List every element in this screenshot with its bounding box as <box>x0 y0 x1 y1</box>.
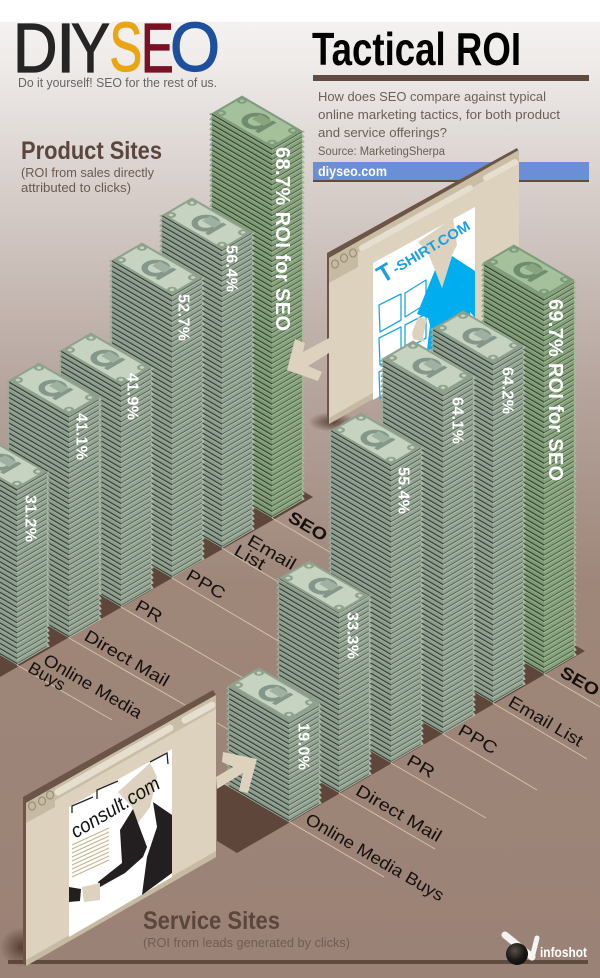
heading: Product Sites: (ROI from sales directly <box>21 165 154 180</box>
browser window: T-shirt site <box>327 148 519 424</box>
site name: -SHIRT.COM <box>389 217 473 277</box>
url bar: diyseo.com <box>318 163 387 179</box>
heading: Product Sites: attributed to clicks) <box>21 180 131 195</box>
heading: Product Sites: Product Sites <box>21 137 162 165</box>
category guide lines: service row <box>217 674 600 877</box>
browser window: consulting site <box>23 690 216 966</box>
infoshot logo: infoshot <box>540 944 587 960</box>
url bar <box>313 162 589 182</box>
logo: DIYSEO <box>13 8 220 87</box>
stack: product Online Media Buys <box>0 437 50 665</box>
intro text: and service offerings? <box>318 125 447 140</box>
site name: consult.com <box>67 773 164 843</box>
category labels: product row: PPC <box>183 566 229 603</box>
base shadow: product row <box>0 473 313 677</box>
category labels: service row: Direct Mail <box>353 781 445 846</box>
infoshot logo <box>505 935 587 965</box>
heading: Service Sites: Service Sites <box>143 907 280 935</box>
category labels: product row: PR <box>132 596 166 627</box>
stack: product SEO <box>210 96 304 518</box>
value: 68.7% ROI for SEO: 68.7% ROI for SEO <box>271 147 293 331</box>
stack: service PR <box>328 413 424 763</box>
heading: Service Sites <box>143 907 350 950</box>
category labels: product row: List <box>231 541 269 574</box>
logo: DIYSEO: O <box>170 8 220 86</box>
category labels: service row: PPC <box>455 721 501 758</box>
logo: DIYSEO: Y <box>71 9 110 87</box>
category labels: product row: Email <box>244 531 299 574</box>
stack: product PR <box>58 333 154 607</box>
intro text: Source: MarketingSherpa <box>318 146 446 158</box>
category labels: product row: SEO <box>285 508 331 545</box>
product boxes <box>379 280 426 398</box>
bottom rule <box>8 960 588 964</box>
arrow: consulting window to SEO stack <box>216 752 257 793</box>
stack: service Email List <box>430 311 526 703</box>
value: 64.2%: 64.2% <box>498 367 516 414</box>
logo: DIYSEO: D <box>13 9 58 87</box>
value: 41.1%: 41.1% <box>72 413 90 460</box>
stack: service SEO <box>482 245 576 674</box>
stack: service PPC <box>380 341 476 734</box>
category labels: service row: PR <box>403 751 438 782</box>
value: 69.7% ROI for SEO: 69.7% ROI for SEO <box>544 299 566 481</box>
window shadow: t-shirt site <box>308 412 356 432</box>
heading: Product Sites <box>21 137 162 195</box>
text lines <box>72 828 109 877</box>
logo tagline: Do it yourself! SEO for the rest of us. <box>18 76 217 90</box>
category labels: service row: Online Media Buys <box>302 810 447 905</box>
stack: service Direct Mail <box>276 561 372 793</box>
value: 33.3%: 33.3% <box>344 612 360 659</box>
website page <box>69 749 172 937</box>
value: 41.9%: 41.9% <box>124 373 140 420</box>
title: Tactical ROI <box>312 23 521 75</box>
title rule <box>313 75 589 81</box>
business person <box>69 763 172 902</box>
logo: DIYSEO: S <box>110 8 142 86</box>
logo: DIYSEO: E <box>141 9 174 87</box>
stack: product Direct Mail <box>6 363 102 638</box>
site name initial: T <box>372 258 399 289</box>
value: 19.0%: 19.0% <box>294 723 312 770</box>
stack: product Email List <box>160 198 254 548</box>
category labels: product row <box>25 508 331 723</box>
category labels: service row <box>302 663 600 905</box>
person in blue shirt <box>412 218 475 350</box>
stack: product PPC <box>110 243 204 578</box>
intro text: online marketing tactics, for both product <box>318 107 560 122</box>
arrow: t-shirt window to SEO stack <box>287 338 329 381</box>
heading: Service Sites: (ROI from leads generated by clicks) <box>143 935 350 950</box>
category labels: service row: Email List <box>505 692 587 751</box>
base shadow: service row <box>217 628 585 853</box>
category labels: product row: Online Media <box>40 650 146 723</box>
category labels: product row: Buys <box>25 658 69 695</box>
category guide lines: product row <box>17 518 333 720</box>
value: 64.1%: 64.1% <box>448 397 466 444</box>
intro text: How does SEO compare against typical <box>318 89 546 104</box>
intro text <box>318 89 560 158</box>
website page <box>373 207 475 400</box>
stack: service Online Media Buys <box>226 668 322 822</box>
page tabs <box>72 753 168 813</box>
value: 52.7%: 52.7% <box>174 294 192 341</box>
value: 55.4%: 55.4% <box>394 467 412 514</box>
logo: DIYSEO: I <box>56 9 75 87</box>
value: 56.4%: 56.4% <box>222 245 240 292</box>
category labels: product row: Direct Mail <box>81 626 173 691</box>
value: 31.2%: 31.2% <box>22 495 38 542</box>
category labels: service row: SEO <box>557 663 600 700</box>
window shadow: consulting site <box>0 927 44 967</box>
